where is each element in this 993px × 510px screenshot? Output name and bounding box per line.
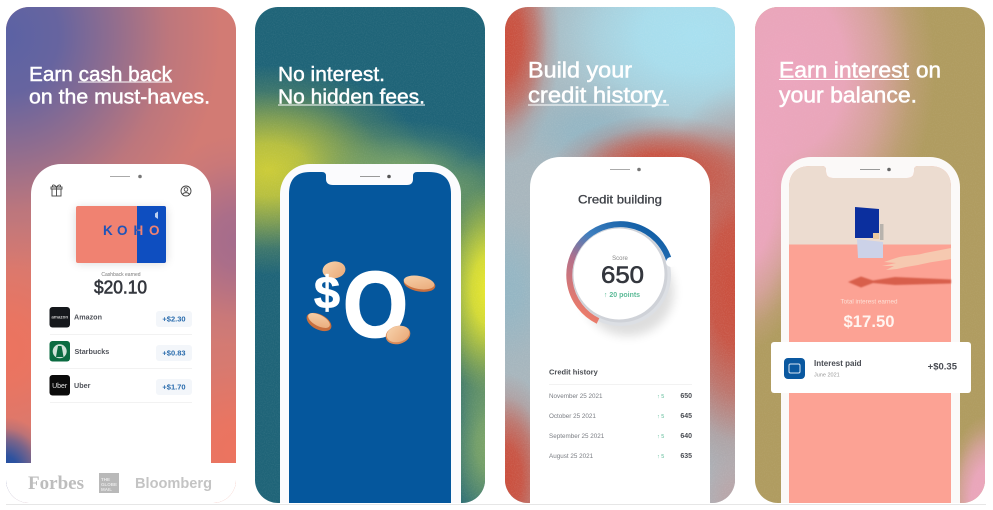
credit history list: Credit history [549,368,599,376]
phone [280,164,461,503]
total interest earned: $17.50 [844,312,894,331]
KOHO card [76,206,166,263]
zero dollars: $ [314,267,340,318]
row: Uber [50,375,192,396]
credit history list: 640 [680,433,692,440]
score gauge: ↑ 20 points [604,292,640,299]
icon: profile [181,186,191,196]
heading [779,58,941,108]
panel: cash back [6,7,236,503]
heading [278,66,425,106]
phone [781,157,960,503]
row: Amazon: amazon [51,314,68,320]
heading: on [916,58,941,82]
credit history list: 650 [680,393,692,400]
coins [304,273,437,347]
interest paid card [771,342,971,393]
press logos strip: Bloomberg [135,475,212,492]
heading: on the must-haves. [29,86,210,108]
credit history list: September 25 2021 [549,433,605,440]
KOHO card: O [149,223,160,238]
panel: no interest [255,7,485,503]
score gauge: 650 [601,262,644,289]
KOHO card: O [117,223,128,238]
title: Credit building [578,192,662,206]
gradient background [505,7,735,503]
credit history list: August 25 2021 [549,453,594,460]
zero dollars [314,270,406,338]
heading [30,66,208,104]
cashback earned: $20.10 [94,278,147,298]
heading: No hidden fees. [278,86,425,108]
row: Starbucks: Starbucks [74,347,109,356]
gradient background [755,7,985,503]
phone [31,164,211,463]
interest paid card: June 2021 [814,372,840,378]
row: Amazon: Amazon [74,312,102,322]
row: Amazon [50,307,192,328]
illustration: card in holder and hand [848,207,951,288]
row: Uber: Uber [52,383,68,390]
credit history list: October 25 2021 [549,413,596,420]
icon: koho app [784,358,805,379]
zero dollars: O [343,252,408,356]
heading: credit history. [528,82,668,108]
row: Uber: +$1.70 [162,382,186,392]
press logos strip: Forbes [28,473,84,494]
row: Starbucks [50,341,192,362]
KOHO card: H [134,223,143,238]
heading: No interest. [278,63,385,86]
heading: Build your [528,58,632,82]
panel: credit history [505,7,735,503]
phone [530,157,710,503]
credit history list: ↑ 5 [657,454,664,460]
row: Starbucks: +$0.83 [162,348,186,358]
heading: Earn interest [779,58,909,82]
interest paid card: +$0.35 [928,362,958,372]
interest paid card: Interest paid [814,359,862,368]
gradient background [6,7,236,503]
credit history list: 645 [680,413,692,420]
press logos strip: MAIL [101,487,112,492]
credit history list: ↑ 5 [657,434,664,440]
credit history list: ↑ 5 [657,394,664,400]
coin behind dollar [322,261,346,278]
KOHO card: K [103,223,113,238]
row: Amazon: +$2.30 [162,314,186,324]
press logos strip: THE [101,477,110,482]
score gauge [569,224,676,336]
cashback earned: Cashback earned [101,272,141,278]
score gauge: Score [612,256,628,262]
credit history list: 635 [680,453,692,460]
icon: gift [51,185,62,196]
bottom baseline [6,504,986,505]
credit history list: ↑ 5 [657,414,664,420]
total interest earned [840,299,898,328]
press logos strip: GLOBE [101,482,117,487]
credit history list: November 25 2021 [549,393,603,400]
credit history list [549,368,692,460]
gradient background [255,7,485,503]
row: Uber: Uber [74,381,91,390]
heading: Earn cash back [29,63,173,86]
heading: your balance. [779,82,917,108]
press logos strip [6,463,236,503]
panel: earn interest [755,7,985,503]
total interest earned: Total interest earned [840,298,898,306]
heading [528,58,669,108]
